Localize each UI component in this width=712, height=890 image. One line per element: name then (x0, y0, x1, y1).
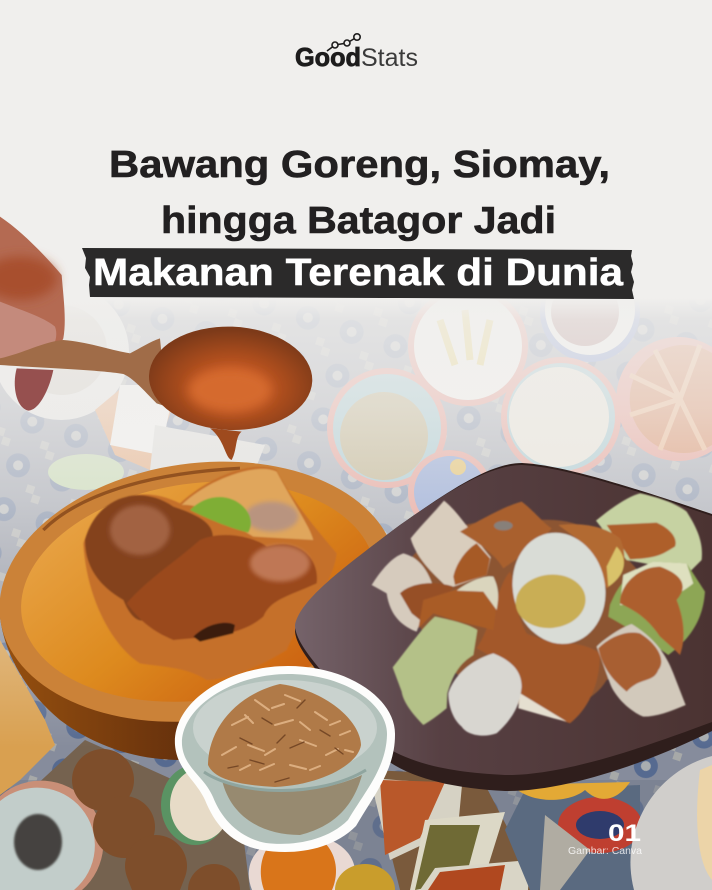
spoon bowl with sauce (147, 324, 314, 433)
title (82, 144, 634, 299)
logo: GoodStats (295, 34, 418, 72)
glossy patch top (245, 502, 298, 532)
cucumber lower right (608, 562, 705, 655)
tofu base (518, 693, 567, 722)
sauce on cabbage (418, 588, 497, 630)
sauce left (400, 583, 453, 620)
orange sauce highlight (188, 368, 272, 412)
bowl: yogurt (0, 781, 103, 890)
dumpling bottom right (597, 624, 686, 717)
dumpling left (372, 553, 433, 632)
food underlay (400, 519, 661, 708)
bowl: yellow (335, 864, 395, 890)
bowl: sesame (327, 368, 447, 488)
title line 1: Bawang Goreng, Siomay, (109, 144, 610, 186)
page number: 01 (608, 820, 641, 847)
sauce drip (210, 428, 242, 460)
grey fold (494, 521, 513, 530)
spoon handle (0, 338, 167, 407)
falafel (72, 749, 240, 890)
flatbreads (370, 778, 530, 890)
boiled egg (502, 524, 616, 653)
bowl: cream (501, 357, 621, 477)
bowl: orange (616, 337, 712, 461)
hand (0, 217, 65, 411)
plate rim (0, 437, 414, 747)
plate surface (7, 460, 390, 724)
wooden board (20, 740, 250, 890)
flatbread: left (0, 640, 55, 795)
bowl: cucumber (48, 454, 124, 490)
lemon slices (512, 782, 630, 800)
sauce on dumpling right (598, 632, 661, 692)
inner rim (193, 680, 377, 776)
glass bowl body (182, 674, 387, 844)
plate surface (295, 465, 712, 775)
wooden board right (370, 770, 540, 890)
logo: GoodStats: Stats (361, 44, 418, 72)
cucumber top right (596, 493, 702, 572)
peanut sauce left (85, 495, 213, 621)
bowl: white cream top (408, 286, 528, 406)
shallot mound (208, 684, 361, 787)
bowl: left white (0, 284, 129, 420)
dark cavity (193, 623, 235, 642)
title line 2: hingga Batagor Jadi (161, 200, 556, 242)
green cabbage roll (393, 617, 477, 725)
white sticker outline (175, 666, 395, 852)
bowl: green handled cream (161, 765, 230, 845)
cabbage top fold (457, 576, 498, 610)
photo: batagor on wooden plate (0, 437, 414, 760)
image credit: Gambar: Canva (568, 846, 642, 857)
fritter base (83, 467, 337, 680)
siomay right of egg (558, 524, 624, 588)
photo: glass bowl of fried shallots (175, 666, 395, 852)
plate rim shadow (295, 463, 712, 791)
bowl: under plate (408, 450, 492, 534)
lime slice (190, 497, 251, 533)
logo: GoodStats: Good (295, 42, 361, 72)
shallot flakes (222, 695, 353, 770)
bowl: blue rim (540, 262, 640, 362)
bowl: orange sauce (249, 832, 355, 890)
highlight bar (82, 248, 634, 299)
central sauce (477, 572, 600, 723)
white roll (448, 653, 522, 736)
photo: hand holding wooden spoon (0, 217, 314, 460)
photo: siomay on dark plate (295, 463, 712, 791)
light fritter area (182, 469, 313, 540)
title line 3: Makanan Terenak di Dunia (93, 252, 624, 294)
plate shadow rim (43, 468, 240, 530)
paper and orange wrap (95, 385, 265, 470)
faded table with bowls background (0, 262, 712, 890)
plate side (0, 600, 213, 760)
tiles: red and blue (505, 785, 642, 890)
glossy patch right (250, 545, 310, 582)
glossy patch (110, 505, 170, 555)
lower shallots (222, 775, 362, 835)
white plate right (630, 756, 712, 890)
egg yolk (513, 571, 588, 631)
bowl front rim (204, 770, 366, 790)
peanut sauce center (127, 535, 317, 640)
dumpling top left (411, 501, 491, 588)
sauce on dumpling (453, 543, 490, 585)
sauce top center (460, 502, 552, 568)
